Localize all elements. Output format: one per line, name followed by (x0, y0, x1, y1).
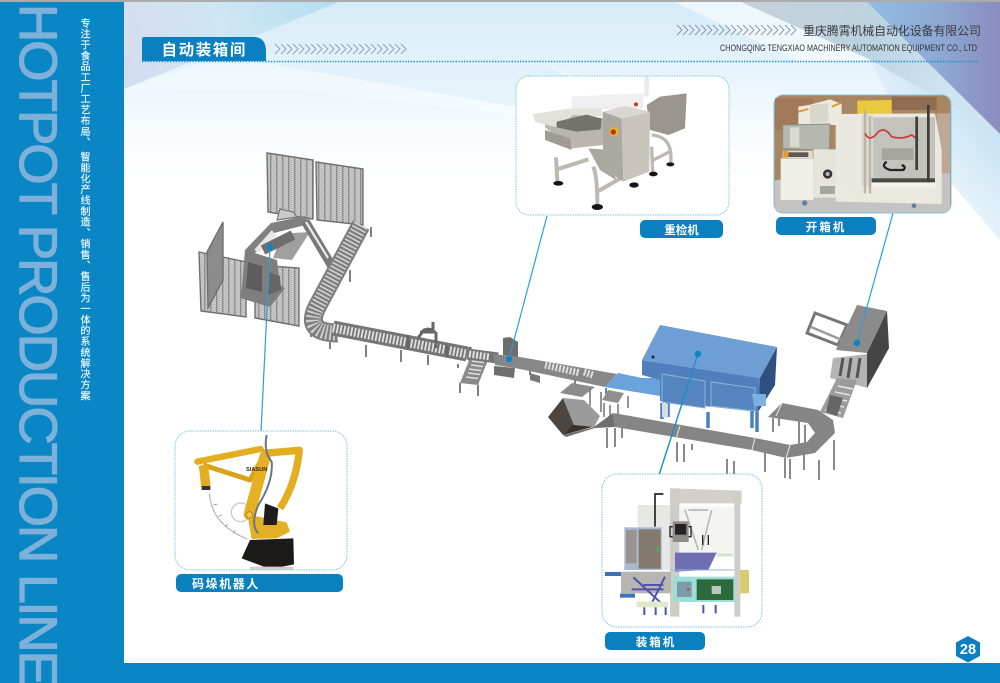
palletizing robot cell (240, 209, 333, 307)
label: checkweigher: 重检机 (664, 223, 699, 237)
left sidebar (0, 2, 124, 683)
label: case packer (605, 632, 705, 650)
chevrons beside section title (275, 44, 406, 54)
sidebar vertical title: HOTPOT PRODUCTION LINE (8, 4, 67, 683)
safety fences (199, 153, 363, 326)
card: case erector (774, 95, 951, 213)
blue case packer (605, 325, 777, 432)
label: case packer: 装箱机 (636, 635, 676, 649)
label: palletizing robot (176, 574, 343, 592)
production line diagram (199, 153, 889, 480)
section title tab: 自动装箱间 (162, 40, 247, 59)
page number badge (956, 636, 980, 662)
icon: yellow robot arm (197, 435, 299, 570)
branch conveyor (460, 358, 488, 385)
main line to checkweigher (467, 354, 498, 358)
card: case packer (602, 474, 762, 627)
icon: checkweigher machine (533, 77, 687, 210)
diverter machines (408, 322, 470, 365)
icon: case erector machine (775, 97, 950, 213)
page number badge: 28 (960, 642, 976, 658)
icon: case packer machine (605, 488, 749, 617)
label: palletizing robot: 码垛机器人 (192, 576, 260, 591)
chute and reject tables (560, 383, 595, 397)
label: case erector: 开箱机 (806, 220, 846, 234)
leader lines and dots (261, 213, 893, 475)
conveyor legs (311, 227, 606, 396)
sidebar slogan: 专注于食品工厂工艺布局、 智能化产线制造、销售、售后为一体的系统解决方案 (78, 18, 89, 401)
dotted header rule (142, 60, 978, 62)
card: checkweigher (516, 76, 729, 215)
bottom band (124, 663, 1000, 683)
company name: 重庆腾霄机械自动化设备有限公司 (803, 23, 981, 38)
lower plate conveyor with U bend (613, 403, 835, 458)
section title tab (142, 37, 266, 61)
label: case erector (776, 217, 876, 235)
card: palletizing robot (175, 431, 347, 570)
chevrons beside company name (677, 25, 796, 35)
label: checkweigher (640, 220, 723, 238)
box opener (807, 305, 889, 418)
icon: yellow robot arm: SIASUN (246, 467, 267, 473)
roller conveyor: palletizer infeed (313, 225, 361, 333)
